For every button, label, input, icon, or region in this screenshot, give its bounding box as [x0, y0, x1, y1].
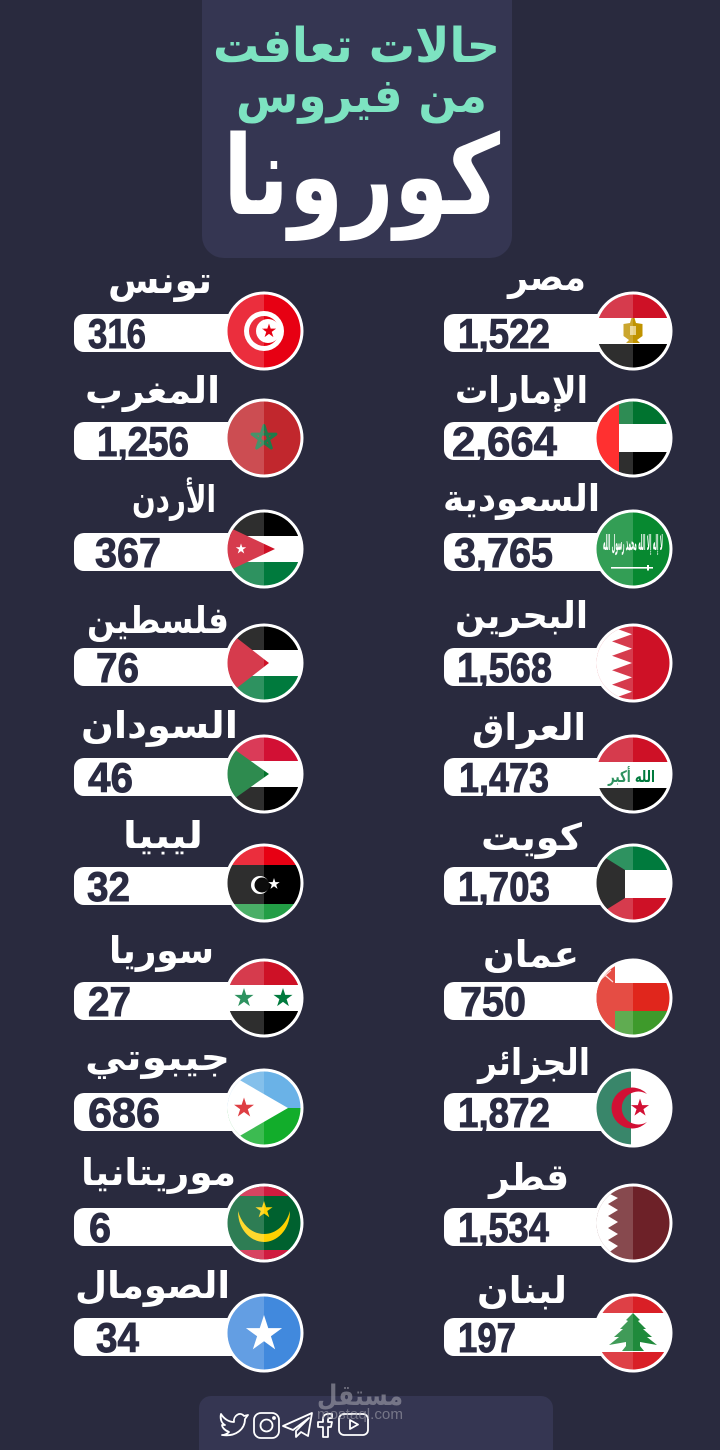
country name: ليبيا	[123, 814, 203, 857]
value pill	[444, 533, 605, 571]
row: Egypt	[444, 276, 672, 370]
icon: flag of Algeria	[593, 1068, 673, 1148]
value: 1,473	[459, 754, 549, 801]
value: 1,522	[458, 310, 550, 357]
value pill	[74, 422, 235, 460]
value: 750	[460, 978, 526, 1025]
value: 76	[96, 644, 139, 691]
value: 1,703	[458, 863, 550, 910]
icon: flag of Lebanon	[593, 1293, 673, 1373]
row: Libya	[74, 814, 304, 923]
value: 686	[88, 1089, 160, 1136]
value: 1,534	[458, 1204, 550, 1251]
icon: flag of Mauritania	[224, 1183, 304, 1263]
panel: title	[202, 0, 512, 258]
country name: الجزائر	[476, 1041, 590, 1084]
icon: flag of Sudan	[224, 734, 304, 814]
row: Bahrain	[444, 594, 673, 703]
value: 3,765	[454, 529, 553, 576]
value pill	[444, 982, 605, 1020]
row: Syria	[74, 929, 304, 1038]
icon: facebook	[318, 1414, 332, 1437]
watermark	[317, 1379, 403, 1423]
row: Algeria	[444, 1041, 673, 1148]
country name: مصر	[506, 256, 586, 299]
row: Kuwait	[444, 816, 673, 923]
panel: footer with social icons	[199, 1396, 553, 1450]
row: Qatar	[444, 1156, 673, 1263]
icon: flag of Iraq: الله أكبر	[607, 766, 655, 786]
value pill	[74, 533, 235, 571]
icon: flag of Oman	[593, 958, 673, 1038]
heading line 2: من فيروس	[236, 68, 487, 124]
value pill	[444, 648, 605, 686]
icon: flag of Djibouti	[224, 1068, 304, 1148]
row: Palestine	[74, 599, 304, 703]
country name: موريتانيا	[81, 1151, 236, 1194]
value: 34	[96, 1314, 140, 1361]
country name: المغرب	[85, 369, 220, 412]
value: 6	[89, 1204, 111, 1251]
icon: flag of Somalia	[224, 1293, 304, 1373]
icon: flag of Libya	[224, 843, 304, 923]
row: Djibouti	[74, 1052, 304, 1148]
value: 2,664	[452, 418, 558, 465]
icon: youtube	[339, 1414, 368, 1435]
row: Iraq	[444, 706, 673, 814]
icon: flag of UAE	[593, 398, 673, 478]
country name: تونس	[108, 259, 212, 302]
icon: flag of Tunisia	[224, 291, 304, 371]
icon: telegram	[283, 1413, 312, 1437]
value pill	[444, 314, 605, 352]
watermark: mostaql.com	[317, 1406, 403, 1423]
row: Sudan	[74, 704, 304, 814]
value pill	[74, 648, 235, 686]
icon: flag of Jordan	[224, 509, 304, 589]
value pill	[74, 1208, 235, 1246]
icon: flag of Morocco	[224, 398, 304, 478]
value pill	[444, 1208, 605, 1246]
country name: العراق	[472, 706, 586, 749]
value pill	[444, 867, 605, 905]
value pill	[74, 758, 235, 796]
value pill	[444, 1093, 605, 1131]
icon: flag of Qatar	[593, 1183, 673, 1263]
country name: جيبوتي	[85, 1036, 230, 1079]
heading line 3: كورونا	[223, 112, 500, 241]
icon: twitter	[221, 1414, 248, 1435]
country name: لبنان	[477, 1269, 567, 1312]
country name: الصومال	[75, 1264, 230, 1307]
country name: السودان	[81, 704, 238, 747]
row: Oman	[444, 933, 673, 1038]
country name: فلسطين	[87, 599, 229, 642]
row: UAE	[444, 369, 673, 478]
row: Somalia	[74, 1264, 304, 1373]
row: Jordan	[74, 476, 304, 589]
row: Saudi Arabia	[443, 477, 673, 589]
icon: instagram	[254, 1413, 279, 1438]
icon: flag of Kuwait	[593, 843, 673, 923]
icon: flag of Egypt	[593, 291, 673, 371]
value pill	[74, 867, 235, 905]
country name: كويت	[481, 816, 582, 859]
icon: flag of Syria	[224, 958, 304, 1038]
value: 1,256	[97, 418, 189, 465]
row: Tunisia	[74, 275, 304, 370]
value pill	[74, 314, 235, 352]
country name: الأردن	[132, 476, 216, 521]
row: Lebanon	[444, 1269, 673, 1373]
value: 316	[88, 310, 146, 357]
country name: البحرين	[455, 594, 588, 637]
value pill	[74, 1093, 235, 1131]
icon: flag of Palestine	[224, 623, 304, 703]
row: Mauritania	[74, 1151, 304, 1263]
value: 27	[88, 978, 131, 1025]
value: 46	[88, 754, 133, 801]
row: Morocco	[74, 369, 304, 478]
country name: الإمارات	[455, 369, 588, 412]
country name: السعودية	[443, 477, 600, 520]
value: 32	[87, 863, 130, 910]
value pill	[444, 422, 605, 460]
value pill	[444, 758, 605, 796]
country name: سوريا	[109, 929, 214, 972]
country name: عمان	[483, 933, 579, 976]
value pill	[74, 1318, 235, 1356]
heading line 1: حالات تعافت	[213, 18, 500, 74]
icon: flag of Iraq	[593, 734, 673, 814]
value: 1,568	[457, 644, 552, 691]
value: 367	[95, 529, 161, 576]
value pill	[74, 982, 235, 1020]
icon: flag of Bahrain	[593, 623, 673, 703]
watermark: مستقل	[317, 1379, 403, 1412]
country name: قطر	[487, 1156, 569, 1199]
icon: flag of Saudi Arabia	[593, 509, 673, 589]
value pill	[444, 1318, 605, 1356]
value: 1,872	[458, 1089, 550, 1136]
value: 197	[458, 1314, 516, 1361]
